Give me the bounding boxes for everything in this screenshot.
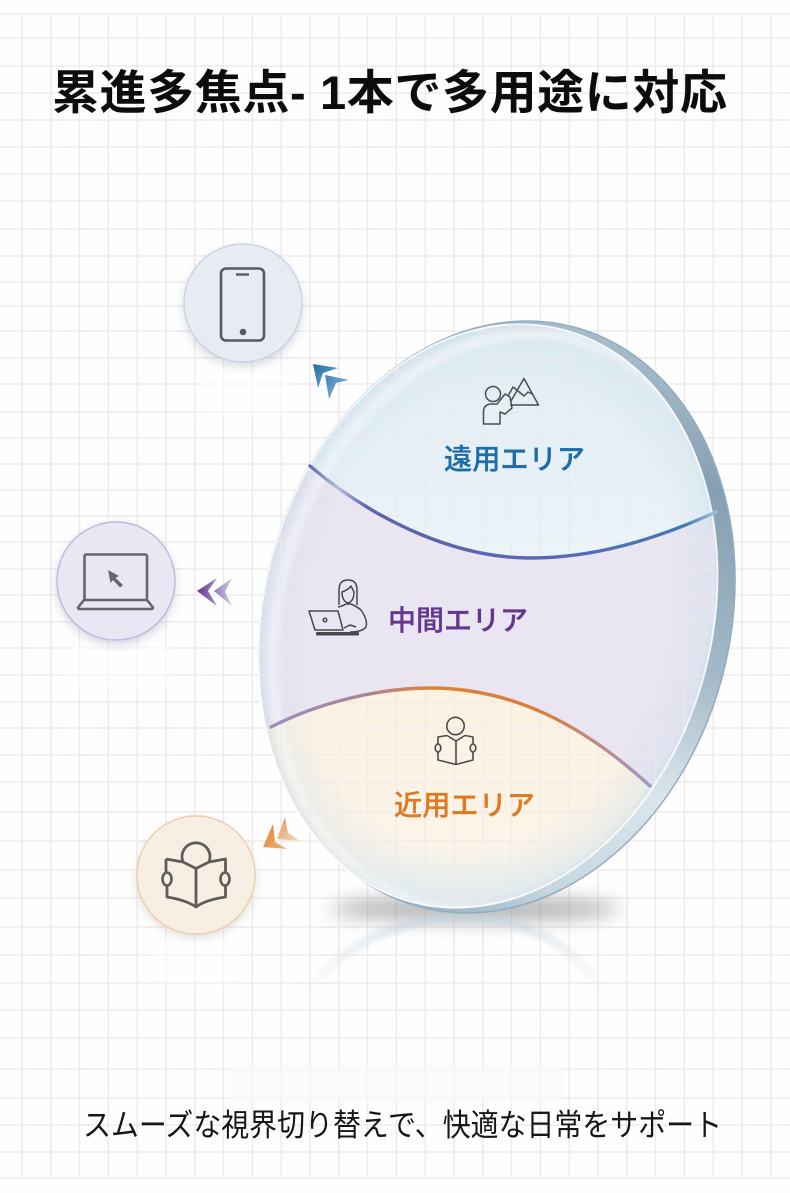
icon: person viewing mountains bbox=[484, 378, 538, 424]
title: 累進多焦点- 1本で多用途に対応 bbox=[52, 66, 727, 119]
icon: smartphone circle bbox=[184, 244, 302, 366]
zone: near bbox=[267, 690, 651, 896]
icon: laptop circle bbox=[57, 522, 175, 644]
arrow: blue to far zone bbox=[313, 364, 349, 399]
caption: スムーズな視界切り替えで、快適な日常をサポート bbox=[83, 1108, 722, 1143]
zone: far bbox=[328, 366, 706, 556]
curve: far boundary bbox=[310, 466, 716, 558]
label: near zone: 近用エリア bbox=[394, 789, 535, 821]
icon: woman at laptop bbox=[309, 580, 366, 634]
icon: person reading bbox=[435, 717, 476, 764]
label: far zone: 遠用エリア bbox=[444, 443, 585, 475]
arrow: purple to middle zone bbox=[197, 578, 232, 606]
curve: near boundary bbox=[271, 688, 650, 786]
lens shadow bbox=[330, 896, 620, 922]
icon: reading circle bbox=[137, 816, 255, 938]
label: middle zone: 中間エリア bbox=[388, 605, 528, 636]
arrow: orange to near zone bbox=[263, 817, 300, 849]
lens bbox=[258, 320, 736, 914]
lens reflection bbox=[300, 917, 600, 1000]
lens zones bbox=[258, 324, 718, 908]
